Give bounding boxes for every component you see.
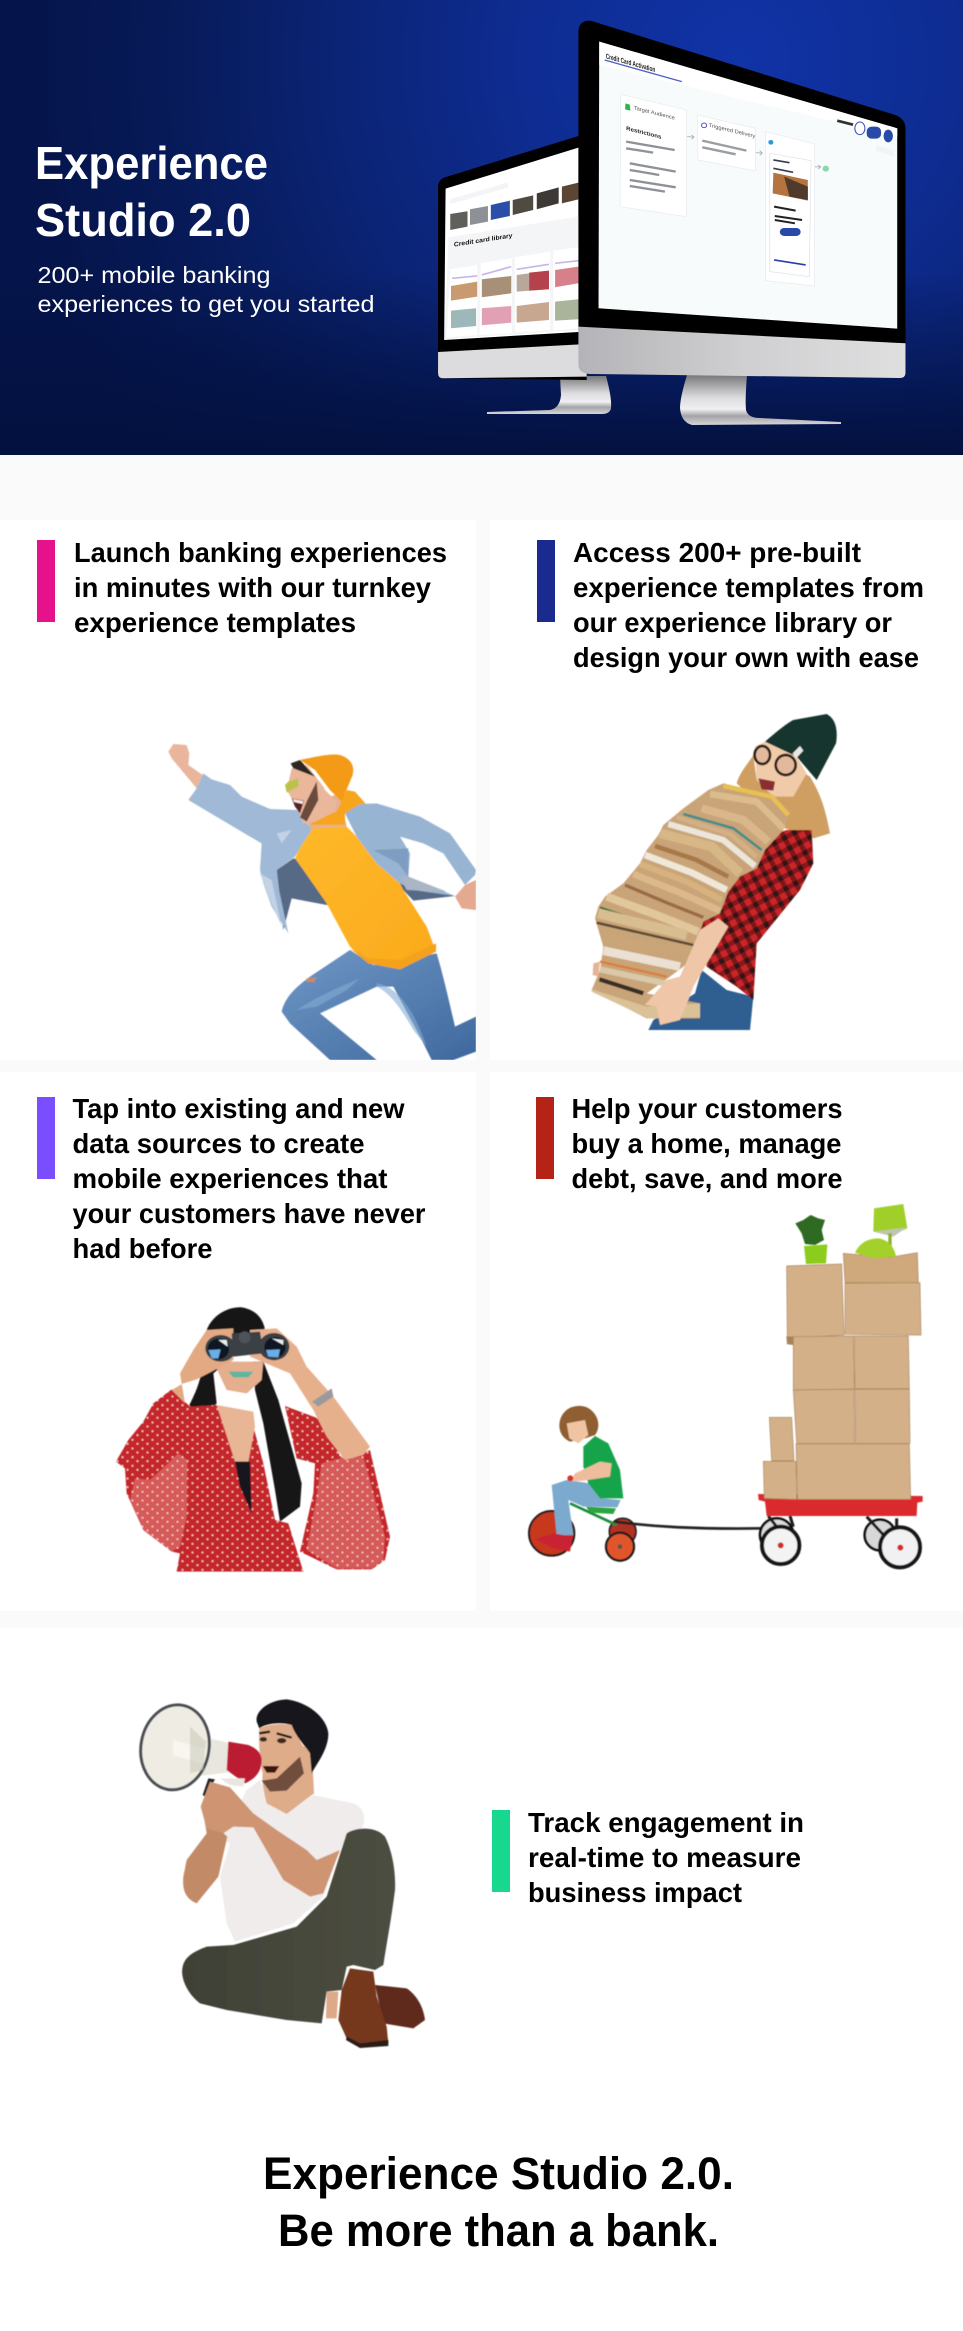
library thumbnails xyxy=(445,183,578,339)
red accent bar xyxy=(536,1097,554,1179)
panel 2 text: our experience library or xyxy=(573,607,892,638)
front monitor with credit card activation journey xyxy=(578,21,905,378)
library thumbnails: Credit card library xyxy=(454,233,513,249)
photo: boy on tricycle pulling wagon of boxes xyxy=(529,1204,923,1567)
background band xyxy=(0,455,963,1628)
stack of cardboard boxes xyxy=(763,1253,921,1499)
panel: track engagement xyxy=(0,1628,963,2331)
panel 3 text xyxy=(72,1093,426,1264)
panel 1 text: experience templates xyxy=(74,607,356,638)
hero title: Studio 2.0 xyxy=(35,194,251,246)
green accent bar xyxy=(492,1810,510,1892)
closing statement: Experience Studio 2.0. xyxy=(263,2148,734,2199)
book stack xyxy=(592,783,790,1018)
closing statement: Be more than a bank. xyxy=(278,2205,719,2256)
megaphone xyxy=(134,1699,262,1797)
hero subtitle xyxy=(38,262,374,317)
right arm and hands xyxy=(201,1782,340,1897)
left forearm xyxy=(183,1803,227,1903)
panel 5 text: real-time to measure xyxy=(528,1842,801,1873)
plant xyxy=(795,1215,827,1264)
panel: access templates xyxy=(490,520,963,1060)
hero title xyxy=(35,137,268,246)
head xyxy=(257,1699,328,1814)
hero subtitle: experiences to get you started xyxy=(38,291,374,317)
panel 2 text: experience templates from xyxy=(573,572,924,603)
panel 3 text: had before xyxy=(72,1233,212,1264)
hero subtitle: 200+ mobile banking xyxy=(38,262,270,288)
hero banner xyxy=(0,0,963,455)
target audience card xyxy=(620,94,686,217)
photo: man with megaphone xyxy=(134,1699,425,2048)
panel 3 text: data sources to create xyxy=(72,1128,364,1159)
panel 3 text: Tap into existing and new xyxy=(72,1093,405,1124)
panel 2 text: Access 200+ pre-built xyxy=(573,537,861,568)
monitor stands xyxy=(487,375,841,425)
toolbar buttons xyxy=(837,121,894,157)
panel 5 text xyxy=(528,1807,804,1908)
target audience card: Target Audience xyxy=(634,106,675,122)
navy accent bar xyxy=(537,540,555,622)
panel 5 text: business impact xyxy=(528,1877,742,1908)
actions card xyxy=(765,132,815,286)
panel 2 text xyxy=(573,537,924,673)
panel 1 text xyxy=(74,537,447,638)
panel 1 text: Launch banking experiences xyxy=(74,537,447,568)
panel 2 text: design your own with ease xyxy=(573,642,919,673)
panel 4 text: buy a home, manage xyxy=(572,1128,842,1159)
panel 4 text: Help your customers xyxy=(572,1093,842,1124)
lamp and clock xyxy=(855,1204,907,1258)
end node xyxy=(823,166,829,172)
pink accent bar xyxy=(37,540,55,622)
triggered delivery card: Triggered Delivery xyxy=(709,123,755,140)
panel 3 text: your customers have never xyxy=(72,1198,426,1229)
panel: launch experiences xyxy=(37,540,476,1060)
hero title: Experience xyxy=(35,137,268,189)
panel 4 text: debt, save, and more xyxy=(572,1163,842,1194)
tricycle xyxy=(529,1503,767,1561)
screen heading: Credit Card Activation xyxy=(606,52,655,74)
flow arrows xyxy=(687,135,821,169)
panel 4 text xyxy=(572,1093,842,1194)
panel 5 text: Track engagement in xyxy=(528,1807,804,1838)
panel: help customers xyxy=(490,1072,963,1611)
boy xyxy=(535,1406,623,1552)
triggered delivery card xyxy=(697,115,755,171)
photo: man running in denim jacket xyxy=(168,744,476,1060)
trousers xyxy=(182,1829,395,2023)
target audience card: Restrictions xyxy=(626,126,662,141)
panel: data sources xyxy=(0,1072,476,1611)
panel 1 text: in minutes with our turnkey xyxy=(74,572,432,603)
closing statement xyxy=(263,2148,734,2256)
back monitor with experience library xyxy=(438,136,587,380)
photo: woman with binoculars xyxy=(116,1307,390,1572)
panel 3 text: mobile experiences that xyxy=(72,1163,388,1194)
binoculars xyxy=(205,1331,289,1362)
photo: woman carrying stack of books xyxy=(592,714,837,1030)
purple accent bar xyxy=(37,1097,55,1179)
boots xyxy=(338,1968,425,2048)
shirt xyxy=(220,1780,364,1942)
wagon xyxy=(758,1494,923,1567)
